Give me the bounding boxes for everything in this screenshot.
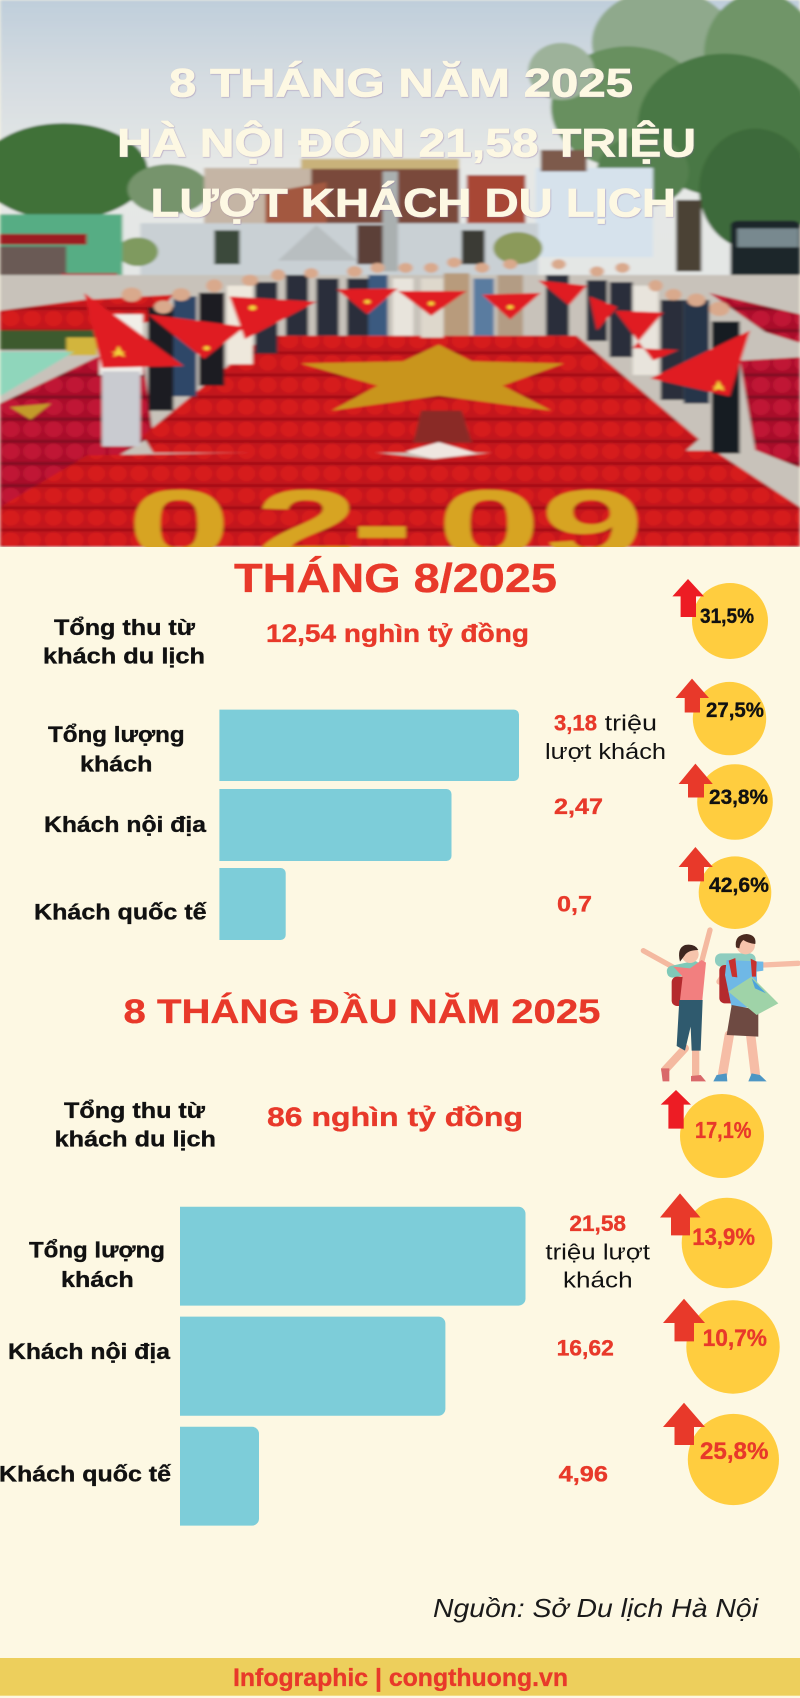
footer bar	[0, 1658, 800, 1696]
bar labels	[0, 1238, 172, 1486]
bar labels: Khách nội địa	[44, 812, 207, 837]
growth badge: 10,7%: 10,7%	[703, 1325, 767, 1352]
main flag	[143, 336, 699, 453]
growth badge: 17,1%: 17,1%	[695, 1117, 752, 1143]
title	[117, 60, 696, 225]
bar values	[545, 1211, 650, 1486]
bottom flag	[0, 451, 800, 547]
bar values: 16,62	[557, 1336, 614, 1360]
growth badge: 10,7%	[663, 1299, 780, 1394]
bar values: khách	[563, 1268, 633, 1293]
bar labels: Khách nội địa	[8, 1339, 171, 1364]
bar labels: Tổng lượng	[29, 1238, 165, 1262]
side fields	[0, 295, 173, 334]
hand-held flags	[84, 280, 750, 396]
bar values	[545, 710, 666, 916]
crowd	[99, 273, 740, 454]
row label: tổng thu: khách du lịch	[55, 1126, 216, 1152]
bar labels: Khách quốc tế	[0, 1461, 172, 1486]
ground	[0, 272, 800, 510]
heading: tháng 8/2025: THÁNG 8/2025	[234, 555, 557, 601]
title: 8 THÁNG NĂM 2025	[169, 60, 633, 105]
illustration: two backpackers	[643, 930, 798, 1081]
row label: tổng thu	[43, 615, 205, 669]
growth badge: 25,8%: 25,8%	[700, 1438, 768, 1465]
growth badge: 42,6%: 42,6%	[709, 874, 769, 897]
bar values: lượt khách	[545, 739, 666, 764]
trees	[590, 0, 722, 65]
row label: tổng thu: Tổng thu từ	[64, 1098, 205, 1123]
bar values: 4,96	[559, 1461, 608, 1486]
bar chart: tháng 8 visitors	[219, 710, 519, 940]
row label: tổng thu	[55, 1098, 216, 1152]
bar values: triệu lượt	[545, 1239, 650, 1264]
growth badge: 42,6%	[679, 847, 771, 929]
growth badge: 13,9%: 13,9%	[692, 1224, 755, 1251]
bar values: 3,18	[554, 710, 597, 735]
bar labels: khách	[61, 1267, 134, 1292]
bar values: 21,58	[569, 1211, 626, 1236]
footer bar: Infographic | congthuong.vn	[233, 1664, 568, 1692]
title: HÀ NỘI ĐÓN 21,58 TRIỆU	[117, 119, 696, 165]
growth badge: 27,5%	[676, 679, 766, 755]
bar chart: 8 tháng visitors	[180, 1207, 526, 1526]
banner and stand	[0, 214, 122, 282]
panel: 8 tháng đầu năm 2025	[0, 993, 780, 1526]
bar values: triệu	[605, 710, 657, 735]
bar values: 2,47	[554, 794, 603, 819]
bar labels: Tổng lượng	[48, 722, 185, 747]
buildings	[204, 168, 321, 225]
growth badge: 17,1%	[661, 1090, 764, 1178]
source note: Nguồn: Sở Du lịch Hà Nội	[433, 1593, 759, 1623]
growth badge: 13,9%	[660, 1193, 772, 1288]
growth badge: 27,5%: 27,5%	[706, 699, 764, 722]
title: LƯỢT KHÁCH DU LỊCH	[150, 180, 676, 225]
row label: tổng thu: khách du lịch	[43, 644, 205, 669]
bar labels: khách	[80, 751, 152, 776]
panel: tháng 8/2025	[34, 555, 773, 940]
growth badge: 31,5%	[672, 579, 768, 659]
bar values: 0,7	[557, 891, 592, 916]
bar labels	[34, 722, 207, 925]
van	[731, 221, 800, 279]
revenue value: 86 nghìn tỷ đồng	[267, 1102, 523, 1132]
revenue value: 12,54 nghìn tỷ đồng	[266, 620, 529, 648]
hero photo: flag made of incense bundles with tourists	[0, 0, 800, 578]
heading: 8 tháng đầu năm 2025: 8 THÁNG ĐẦU NĂM 2025	[124, 993, 600, 1031]
hero photo: flag made of incense bundles with tourists: 02-09	[127, 471, 644, 578]
growth badge: 23,8%	[679, 764, 773, 840]
growth badge: 31,5%: 31,5%	[700, 605, 754, 628]
growth badge: 25,8%	[663, 1403, 779, 1505]
bar labels: Khách quốc tế	[34, 900, 207, 925]
row label: tổng thu: Tổng thu từ	[54, 615, 195, 640]
growth badge: 23,8%: 23,8%	[709, 786, 768, 809]
